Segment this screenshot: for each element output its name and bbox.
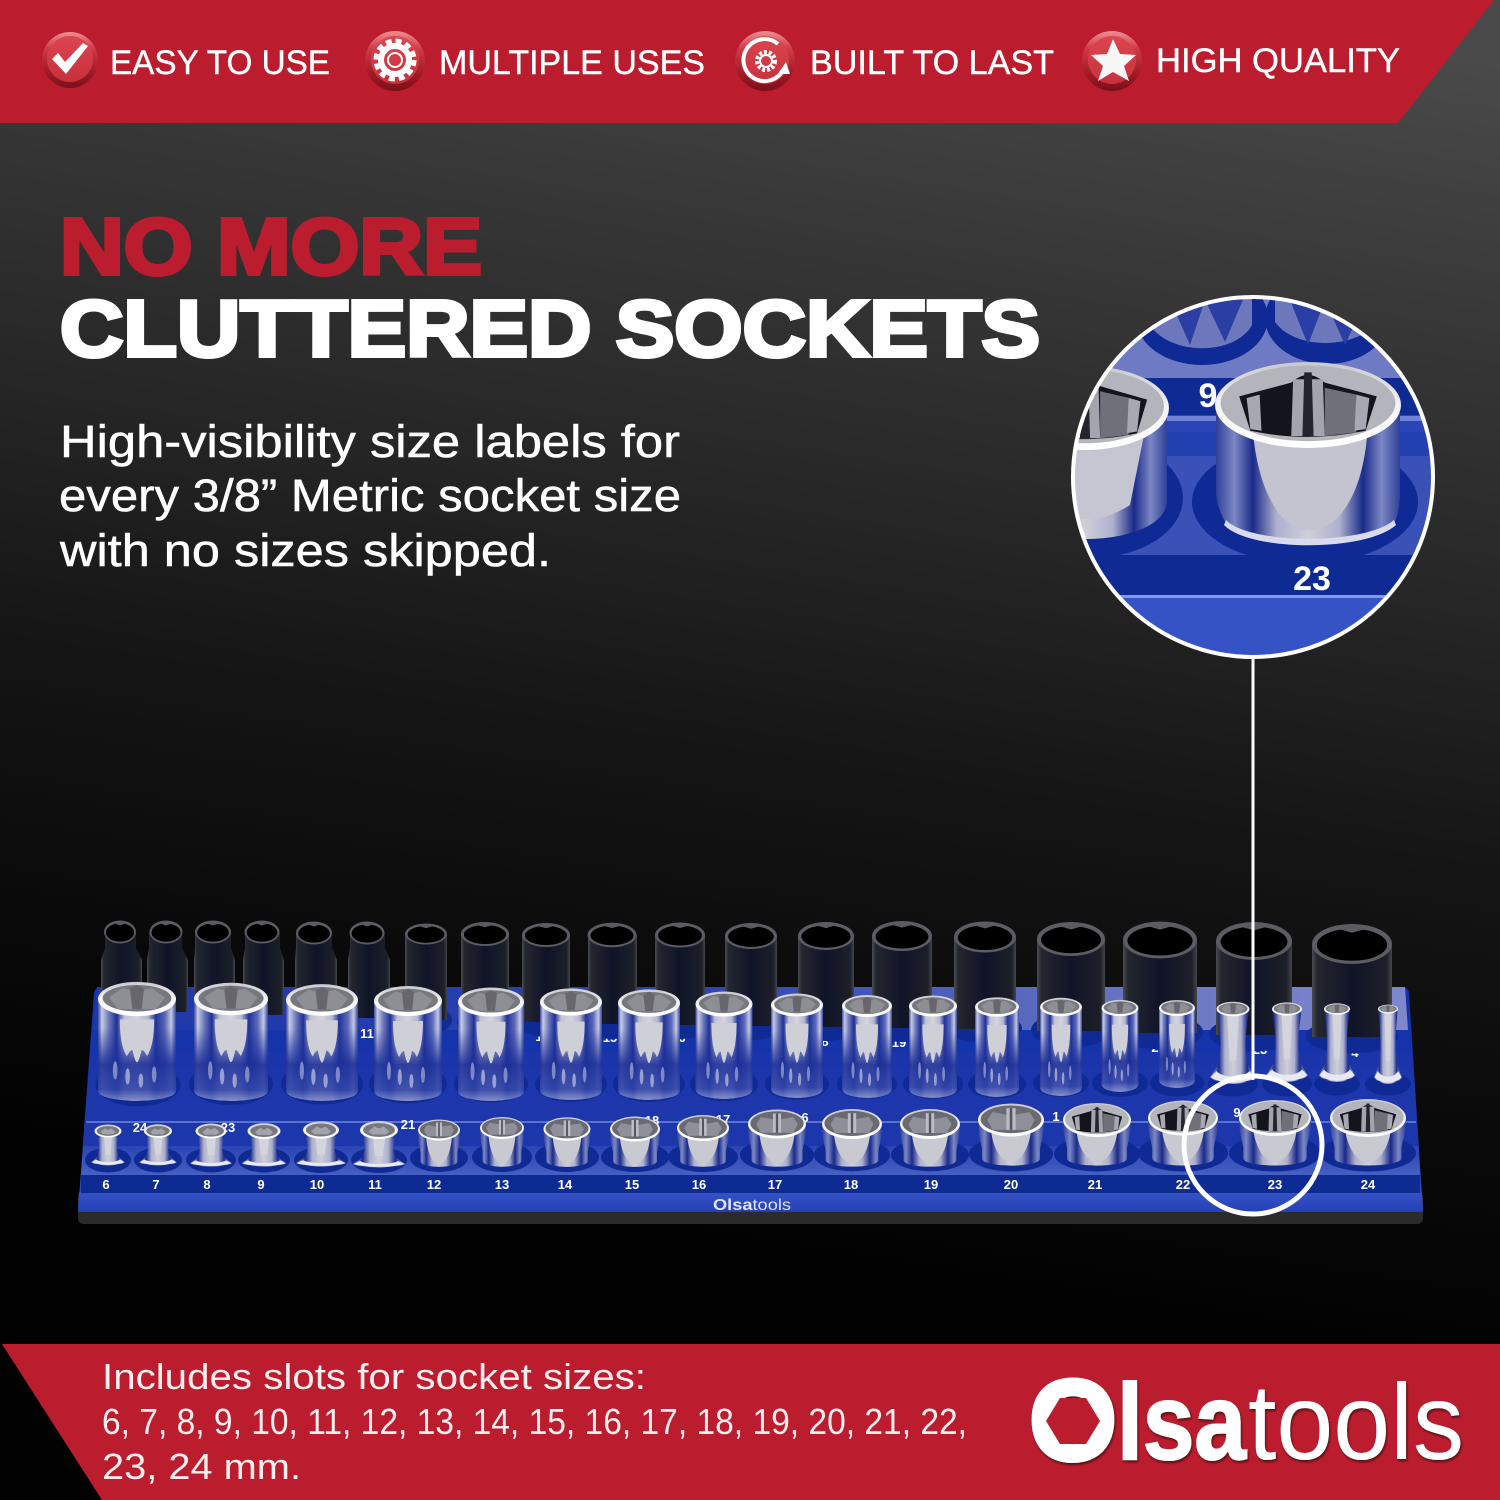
peeking size labels behind sockets: 6 [678,1030,686,1045]
front row size labels: 11 [368,1177,382,1192]
front row size labels: 23 [1268,1177,1282,1192]
front row size labels: 12 [427,1177,441,1192]
peeking size labels behind sockets [133,1026,1359,1135]
tray body [78,987,1423,1212]
heading: cluttered sockets: CLUTTERED SOCKETS [60,284,1040,373]
front row size labels: 18 [844,1177,858,1192]
middle row: deep chrome sockets [96,982,1411,1106]
peeking size labels behind sockets: 23 [221,1120,235,1135]
peeking size labels behind sockets: 15 [603,1030,617,1045]
callout: magnified view of slot 23 [1071,295,1435,659]
icon: multiple uses gear badge [365,31,425,91]
icon: easy to use check badge [42,32,98,88]
front row size labels: 6 [102,1177,110,1192]
callout: small highlight ring on 23 slot [1184,1076,1322,1214]
top red banner [0,0,1494,123]
magnified partial label 9: 9 [1199,377,1217,415]
body text [59,416,681,576]
peeking size labels behind sockets: 17 [716,1112,730,1127]
icon: built to last cycle badge [735,31,795,91]
front row size labels: 13 [495,1177,509,1192]
bottom red banner [2,1344,1500,1500]
front row size labels: 9 [257,1177,265,1192]
footer text: 23, 24 mm. [102,1446,301,1487]
peeking size labels behind sockets: 4 [1351,1045,1359,1060]
magnified left socket [1075,368,1169,539]
socket tray with sockets [78,920,1423,1224]
footer text: 6, 7, 8, 9, 10, 11, 12, 13, 14, 15, 16, 17, 18, 19, 20, 21, 22, [102,1401,967,1442]
tray logo: Olsa tools [713,1197,791,1214]
peeking size labels behind sockets: 19 [892,1035,906,1050]
magnified main socket [1215,362,1401,545]
front row size labels: 21 [1088,1177,1102,1192]
magnified label 23: 23 [1293,560,1331,598]
peeking size labels behind sockets: 9 [1233,1105,1241,1120]
peeking size labels behind sockets: 2 [1151,1040,1159,1055]
tray base [78,1195,1423,1224]
label: multiple uses: MULTIPLE USES [439,44,705,82]
peeking size labels behind sockets: 6 [801,1110,809,1125]
footer text: Includes slots for socket sizes: [102,1356,646,1397]
label: built to last: BUILT TO LAST [810,44,1054,82]
front row size labels: 14 [558,1177,573,1192]
front row: small and shallow chrome sockets [85,1099,1416,1173]
label: high quality: HIGH QUALITY [1156,42,1400,80]
icon: high quality star badge [1082,31,1142,91]
logo: Olsatools: tools [1248,1361,1464,1482]
front row size labels: 8 [203,1177,211,1192]
label: easy to use: EASY TO USE [110,44,330,82]
body text: every 3/8” Metric socket size [59,470,681,521]
heading: no more: NO MORE [60,202,482,291]
back row: black impact sockets [101,920,1398,1054]
front row size labels: 7 [152,1177,160,1192]
body text: with no sizes skipped. [59,525,551,576]
footer text [102,1356,967,1487]
logo: Olsatools: lsa [1117,1361,1247,1482]
peeking size labels behind sockets: 18 [645,1113,659,1128]
logo: Olsatools [1030,1358,1464,1483]
peeking size labels behind sockets: 23 [1253,1042,1267,1057]
front row size labels: 15 [625,1177,639,1192]
peeking size labels behind sockets: 11 [360,1026,374,1041]
body text: High-visibility size labels for [60,416,680,467]
logo: Olsatools: O [1030,1358,1116,1483]
front row size labels: 19 [924,1177,938,1192]
front row size labels: 20 [1004,1177,1018,1192]
magnified upper slots [1142,299,1375,365]
front row size labels: 17 [768,1177,782,1192]
peeking size labels behind sockets: 24 [133,1120,148,1135]
front row size labels: 16 [692,1177,706,1192]
front row size labels: 22 [1176,1177,1190,1192]
peeking size labels behind sockets: 21 [401,1117,415,1132]
front row size labels [102,1177,1376,1192]
peeking size labels behind sockets: 8 [821,1034,829,1049]
peeking size labels behind sockets: 1 [1052,1109,1060,1124]
front row size labels: 24 [1361,1177,1376,1192]
peeking size labels behind sockets: 1 [535,1029,543,1044]
callout: leader line [1252,655,1254,1080]
front row size labels: 10 [310,1177,324,1192]
